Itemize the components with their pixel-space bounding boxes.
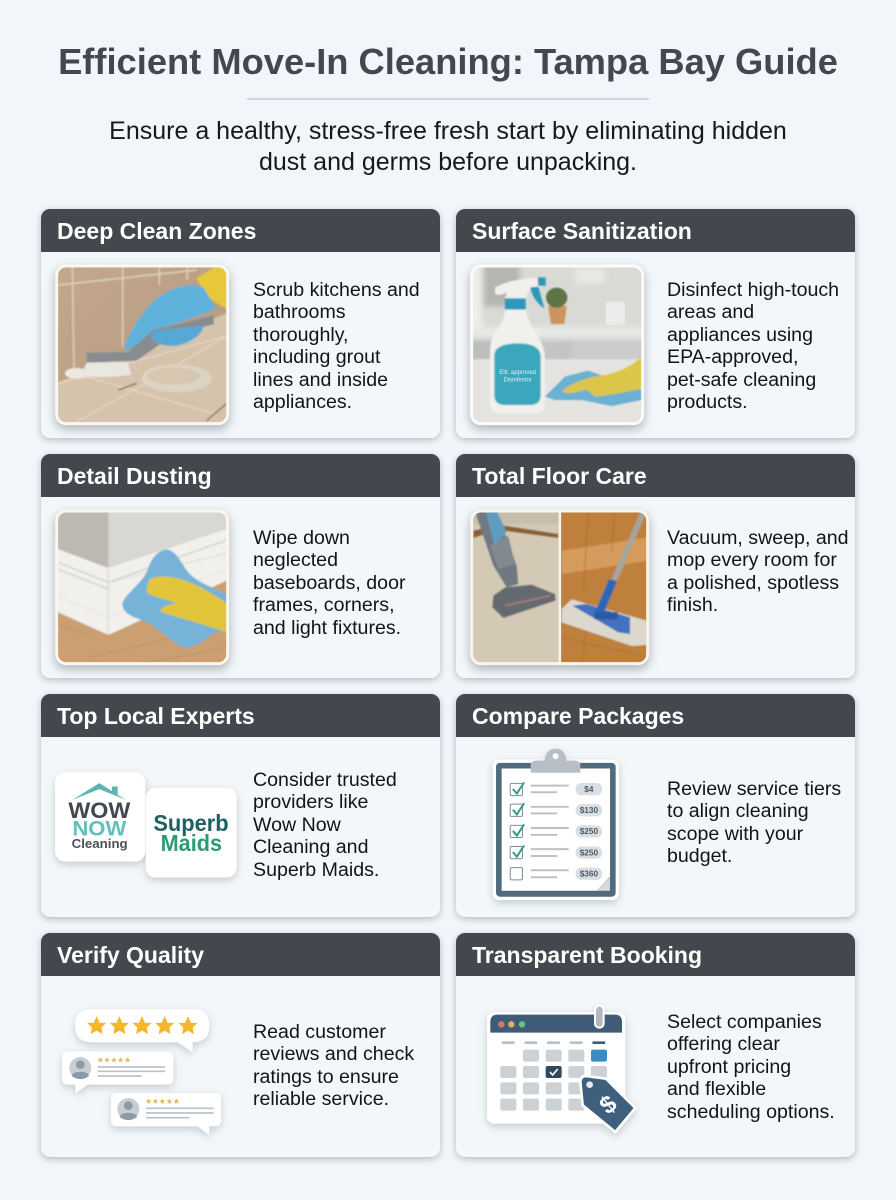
text: deep clean zones: lines and inside: [253, 369, 388, 391]
logo: Superb Maids: Superb: [153, 810, 229, 836]
text: top local experts: [253, 769, 397, 881]
heading: compare packages: Compare Packages: [472, 703, 684, 729]
text: verify quality: Read customer: [253, 1021, 386, 1043]
icon: pricing checklist clipboard: [490, 748, 622, 906]
text: transparent booking: upfront pricing: [667, 1056, 791, 1078]
text: top local experts: Consider trusted: [253, 769, 397, 791]
subtitle: Ensure a healthy, stress-free fresh start by eliminating hidden: [109, 117, 787, 145]
logo: Wow Now Cleaning: WOW: [68, 798, 131, 823]
panel: surface sanitization: [456, 209, 855, 438]
icon: pricing checklist clipboard: $250: [580, 848, 598, 857]
text: detail dusting: and light fixtures.: [253, 617, 401, 639]
text: compare packages: to align cleaning: [667, 800, 809, 822]
heading: deep clean zones: Deep Clean Zones: [57, 218, 256, 244]
subtitle: [109, 117, 787, 176]
text: detail dusting: Wipe down: [253, 527, 350, 549]
text: top local experts: Superb Maids.: [253, 859, 379, 881]
image: spray bottle and cloth: Elit. approved: [499, 370, 536, 376]
logos: cleaning companies: [52, 772, 240, 884]
text: total floor care: finish.: [667, 594, 718, 616]
text: verify quality: reviews and check: [253, 1043, 414, 1065]
icon: pricing checklist clipboard: $250: [580, 827, 598, 836]
bubble: five star rating: [75, 1009, 209, 1052]
panel: deep clean zones: [41, 209, 440, 438]
image: vacuum on carpet and mop on wood floor: [464, 508, 655, 675]
text: verify quality: [253, 1021, 414, 1110]
panel: total floor care: [456, 454, 855, 678]
text: top local experts: Cleaning and: [253, 836, 368, 858]
logo: Superb Maids: Maids: [161, 830, 222, 856]
heading: detail dusting: Detail Dusting: [57, 463, 212, 489]
text: transparent booking: offering clear: [667, 1033, 780, 1055]
image: wiping a baseboard: [50, 508, 235, 675]
text: top local experts: providers like: [253, 791, 368, 813]
icon: pricing checklist clipboard: $130: [580, 806, 598, 815]
logo: Wow Now Cleaning: Cleaning: [72, 837, 128, 851]
text: detail dusting: baseboards, door: [253, 572, 406, 594]
panel: detail dusting: [41, 454, 440, 678]
icon: calendar with price tag: [484, 1005, 638, 1138]
image: gloved hand scrubbing grout: [50, 263, 235, 435]
subtitle: dust and germs before unpacking.: [259, 148, 637, 176]
heading: detail dusting: [41, 454, 440, 497]
text: transparent booking: Select companies: [667, 1011, 822, 1033]
heading: surface sanitization: Surface Sanitization: [472, 218, 692, 244]
panel: verify quality: [41, 933, 440, 1157]
text: top local experts: Wow Now: [253, 814, 341, 836]
heading: top local experts: Top Local Experts: [57, 703, 255, 729]
text: compare packages: scope with your: [667, 823, 803, 845]
panel: transparent booking: [456, 933, 855, 1157]
text: detail dusting: [253, 527, 406, 639]
text: total floor care: a polished, spotless: [667, 572, 839, 594]
text: verify quality: ratings to ensure: [253, 1066, 399, 1088]
icon: price tag: [580, 1076, 635, 1132]
heading: surface sanitization: [456, 209, 855, 252]
title: Efficient Move-In Cleaning: Tampa Bay Guide: [58, 41, 838, 82]
heading: verify quality: Verify Quality: [57, 942, 204, 968]
text: compare packages: [667, 778, 841, 867]
icon: star-rated review bubbles: [58, 1008, 224, 1138]
heading: total floor care: Total Floor Care: [472, 463, 647, 489]
text: surface sanitization: EPA-approved,: [667, 346, 798, 368]
text: detail dusting: frames, corners,: [253, 594, 395, 616]
image: spray bottle and cloth: [464, 263, 650, 435]
text: deep clean zones: including grout: [253, 346, 380, 368]
text: verify quality: reliable service.: [253, 1088, 389, 1110]
text: surface sanitization: areas and: [667, 301, 754, 323]
icon: price tag: $: [595, 1090, 623, 1120]
text: total floor care: mop every room for: [667, 549, 837, 571]
icon: pricing checklist clipboard: $360: [580, 870, 598, 879]
text: surface sanitization: appliances using: [667, 324, 813, 346]
text: deep clean zones: appliances.: [253, 391, 352, 413]
icon: pricing checklist clipboard: $4: [584, 785, 594, 794]
text: surface sanitization: [667, 279, 839, 413]
text: total floor care: [667, 527, 849, 616]
text: surface sanitization: products.: [667, 391, 748, 413]
text: detail dusting: neglected: [253, 549, 338, 571]
text: deep clean zones: [253, 279, 420, 413]
heading: total floor care: [456, 454, 855, 497]
logo: Superb Maids: [146, 788, 237, 878]
text: total floor care: Vacuum, sweep, and: [667, 527, 849, 549]
text: deep clean zones: bathrooms: [253, 301, 346, 323]
heading: top local experts: [41, 694, 440, 737]
text: deep clean zones: thoroughly,: [253, 324, 348, 346]
text: deep clean zones: Scrub kitchens and: [253, 279, 420, 301]
text: transparent booking: [667, 1011, 835, 1123]
text: transparent booking: and flexible: [667, 1078, 766, 1100]
text: surface sanitization: pet-safe cleaning: [667, 369, 816, 391]
heading: verify quality: [41, 933, 440, 976]
logo: Wow Now Cleaning: NOW: [72, 816, 127, 840]
heading: compare packages: [456, 694, 855, 737]
text: transparent booking: scheduling options.: [667, 1101, 835, 1123]
image: spray bottle and cloth: Disinfector: [503, 377, 532, 383]
text: compare packages: Review service tiers: [667, 778, 841, 800]
logo: Wow Now Cleaning: [55, 772, 145, 862]
panel: top local experts: [41, 694, 440, 917]
text: surface sanitization: Disinfect high-touch: [667, 279, 839, 301]
heading: transparent booking: Transparent Booking: [472, 942, 702, 968]
bubble: customer review two: [111, 1093, 221, 1135]
heading: transparent booking: [456, 933, 855, 976]
bubble: customer review one: [62, 1051, 173, 1093]
panel: compare packages: [456, 694, 855, 917]
heading: deep clean zones: [41, 209, 440, 252]
text: compare packages: budget.: [667, 845, 732, 867]
